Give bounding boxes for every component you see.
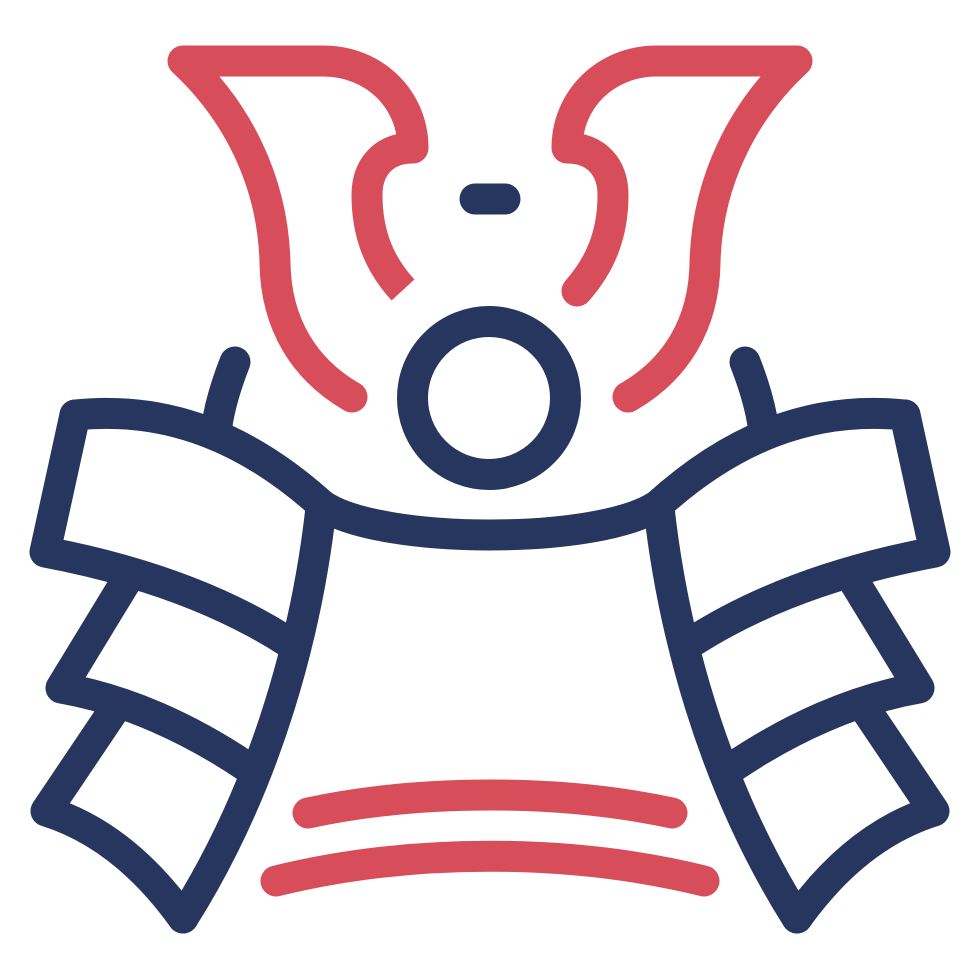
right horn stroke bbox=[745, 362, 763, 425]
right shoulder guard bbox=[659, 415, 935, 918]
waist band lower bbox=[276, 856, 704, 881]
left shoulder guard bbox=[45, 415, 321, 918]
helmet center crest mark bbox=[475, 184, 505, 214]
waist band upper bbox=[308, 795, 672, 813]
face circle bbox=[412, 322, 566, 474]
helmet right crest bbox=[567, 61, 797, 397]
shoulder yoke and chest collar bbox=[75, 413, 905, 535]
left horn stroke bbox=[217, 362, 235, 425]
helmet left crest bbox=[183, 61, 413, 397]
